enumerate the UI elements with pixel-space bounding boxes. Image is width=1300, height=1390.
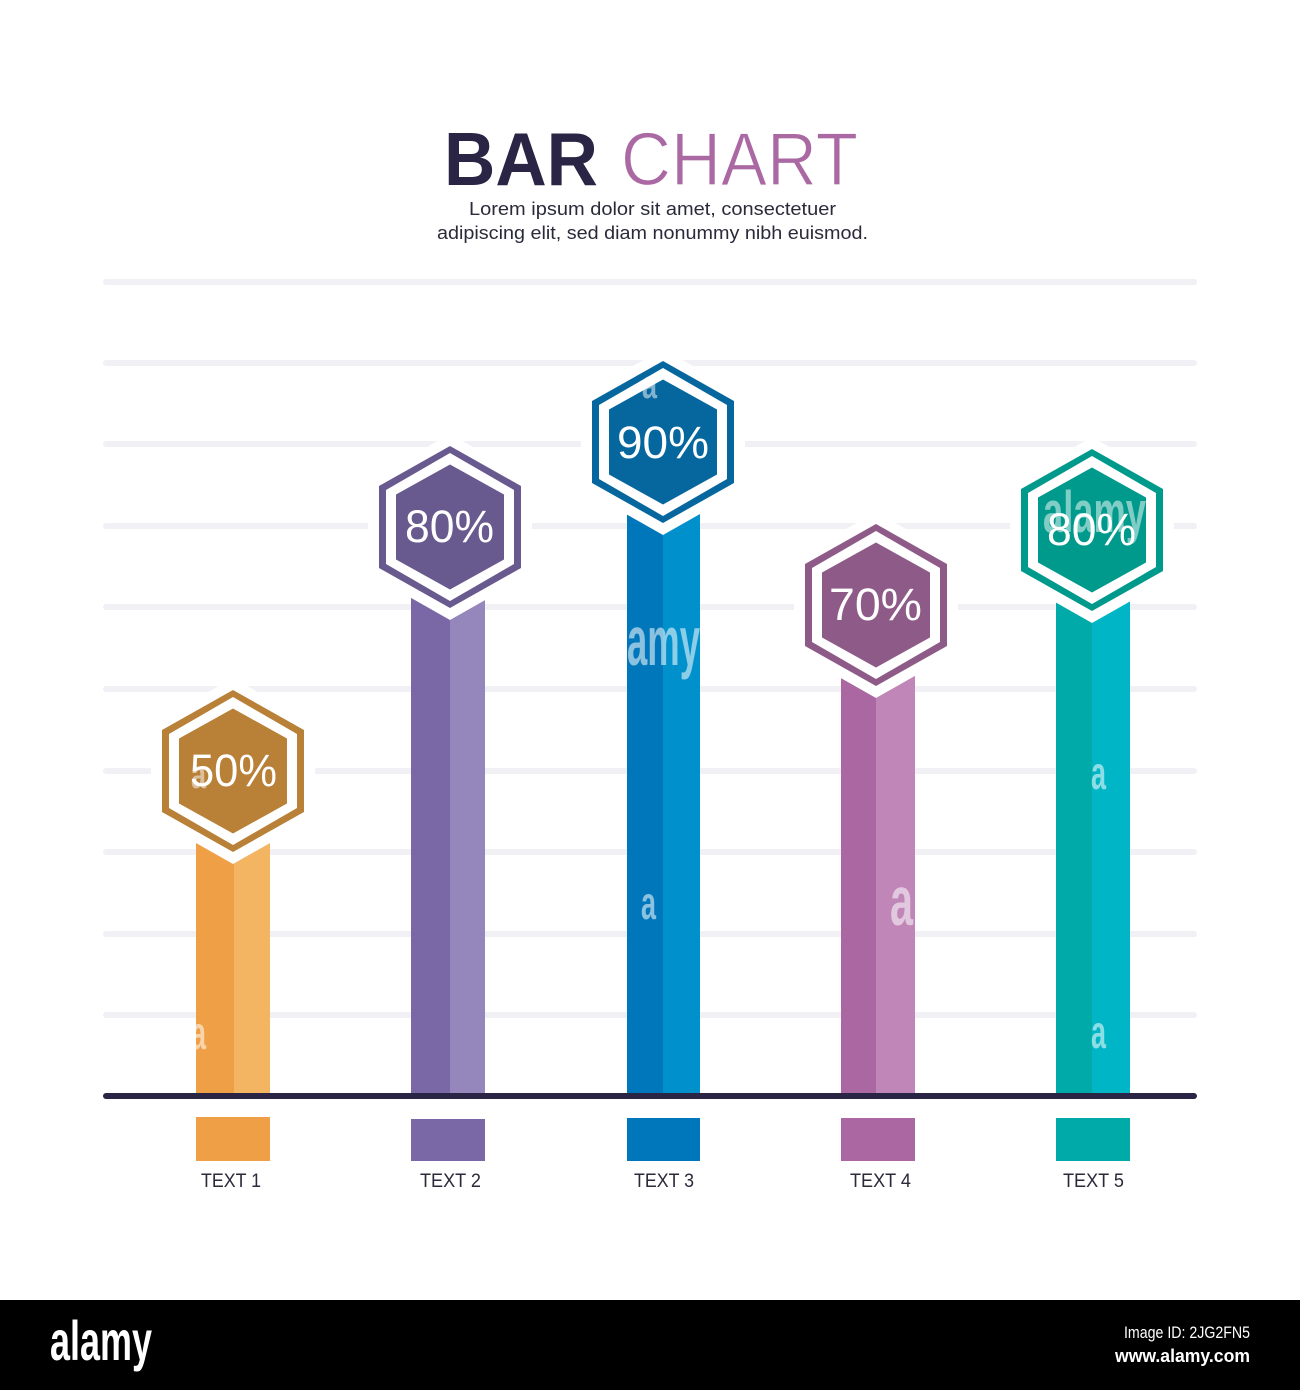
- hexagon badge 70%: [794, 512, 958, 698]
- legend item: text 5: TEXT 5: [1063, 1171, 1124, 1192]
- legend item: text 1: [196, 1117, 270, 1192]
- faint stock watermarks over bars: a: [1091, 1006, 1106, 1058]
- legend item: text 3: TEXT 3: [634, 1171, 694, 1192]
- subtitle text: adipiscing elit, sed diam nonummy nibh euismod.: [437, 222, 868, 243]
- bar 4: 70%: [794, 512, 958, 1095]
- legend item: text 3: [627, 1118, 700, 1192]
- subtitle text: [437, 198, 868, 243]
- legend item: text 4: [841, 1118, 915, 1192]
- faint stock watermarks over bars: a: [890, 862, 914, 940]
- hexagon badge 90%: 90%: [617, 417, 709, 468]
- legend item: text 5: [1056, 1118, 1130, 1192]
- legend item: text 1: TEXT 1: [201, 1171, 261, 1192]
- faint stock watermarks over bars: a: [1091, 747, 1106, 799]
- hexagon badge 80%: 80%: [405, 501, 494, 552]
- baseline axis: [103, 1093, 1197, 1099]
- subtitle text: Lorem ipsum dolor sit amet, consectetuer: [469, 198, 836, 219]
- faint stock watermarks over bars: amy: [627, 602, 700, 680]
- hexagon badge 90%: [581, 349, 745, 535]
- footer logo: alamy: [50, 1309, 152, 1372]
- hexagon badge 80%: [1010, 437, 1174, 623]
- hexagon badge 80%: alamy: [1043, 480, 1146, 545]
- image id: Image ID: 2JG2FN5: [1124, 1323, 1250, 1342]
- faint stock watermarks over bars: a: [641, 877, 656, 929]
- faint stock watermarks over bars: [191, 602, 1106, 1059]
- title: BAR: [444, 117, 598, 201]
- bar 3: 90%: [581, 349, 745, 1095]
- bar 1: 50%: [151, 678, 315, 1095]
- hexagon badge 80%: 80%: [1047, 504, 1136, 555]
- title: [444, 117, 858, 201]
- hexagon badge 80%: [368, 434, 532, 620]
- faint stock watermarks over bars: a: [191, 1007, 206, 1059]
- bar 5: 80%: [1010, 437, 1174, 1095]
- watermark footer: [0, 1300, 1300, 1390]
- legend item: text 2: [411, 1119, 485, 1192]
- website: www.alamy.com: [1114, 1346, 1250, 1366]
- gridlines: [103, 279, 1197, 1018]
- bar 2: 80%: [368, 434, 532, 1095]
- hexagon badge 70%: 70%: [829, 579, 922, 630]
- hexagon badge 50%: [151, 678, 315, 864]
- hexagon badge 50%: a: [191, 753, 207, 797]
- legend item: text 2: TEXT 2: [420, 1171, 481, 1192]
- hexagon badge 50%: 50%: [190, 745, 277, 796]
- title: CHART: [621, 117, 858, 201]
- legend item: text 4: TEXT 4: [850, 1171, 911, 1192]
- hexagon badge 90%: a: [642, 363, 658, 407]
